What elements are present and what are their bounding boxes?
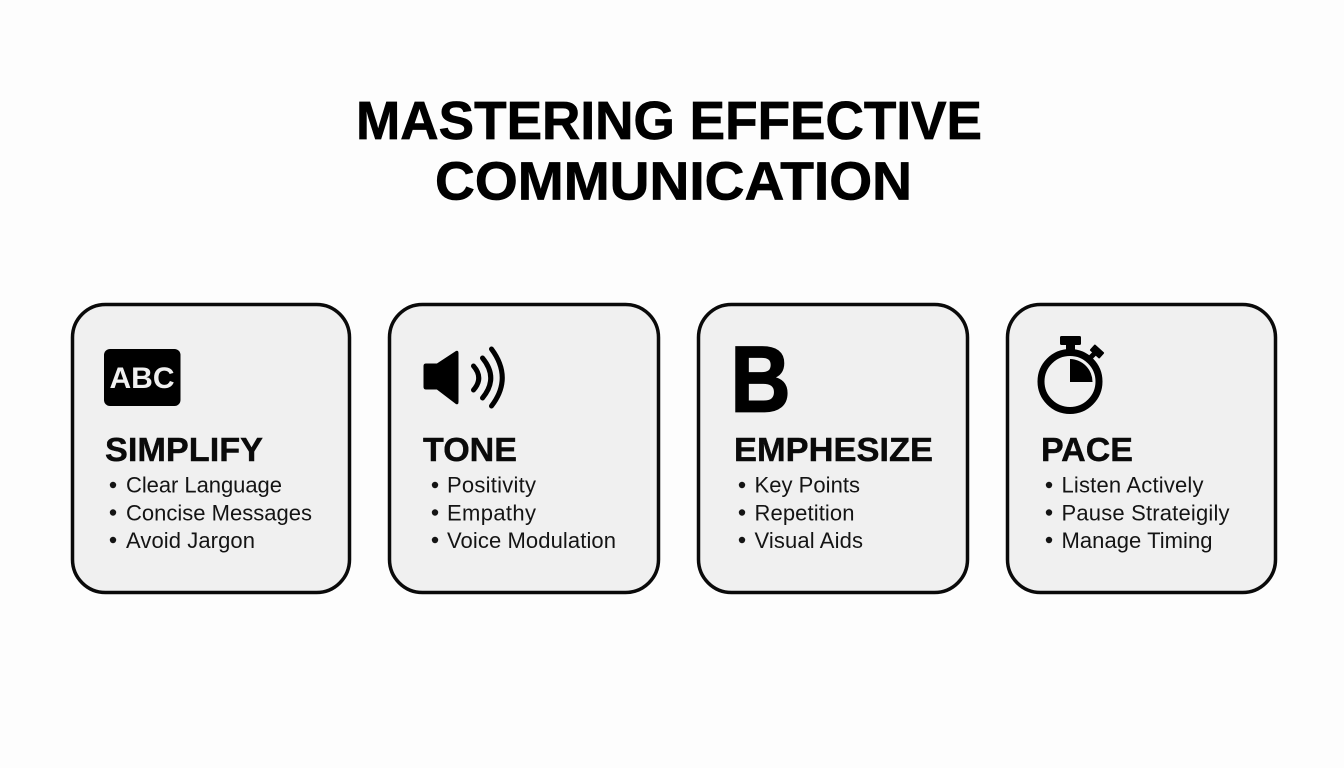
title [356, 91, 982, 212]
panel: simplify [72, 304, 350, 592]
title: MASTERING EFFECTIVE [356, 91, 982, 151]
list: pace items [1046, 472, 1230, 553]
list: pace items: Manage Timing [1062, 528, 1212, 553]
list: simplify items [110, 472, 312, 553]
icon: bold B: B [730, 327, 791, 432]
icon: ABC: ABC [110, 362, 174, 395]
list: simplify items: Avoid Jargon [126, 528, 255, 553]
list: emphesize items: Key Points [754, 472, 860, 498]
list: pace items: Listen Actively [1062, 472, 1204, 498]
icon: stopwatch [1041, 336, 1105, 410]
list: tone items [432, 472, 616, 553]
heading: pace: PACE [1041, 431, 1133, 468]
panel: emphesize [698, 304, 968, 592]
list: tone items: Empathy [447, 500, 536, 526]
panel: tone [390, 304, 658, 592]
heading: emphesize: EMPHESIZE [734, 431, 933, 468]
icon: speaker [424, 349, 502, 406]
list: simplify items: Clear Language [126, 472, 282, 498]
list: emphesize items: Repetition [754, 500, 854, 526]
heading: simplify: SIMPLIFY [105, 431, 263, 468]
list: emphesize items: Visual Aids [754, 528, 863, 553]
heading: tone: TONE [423, 431, 517, 468]
list: simplify items: Concise Messages [126, 500, 312, 526]
list: tone items: Voice Modulation [447, 528, 616, 553]
title: COMMUNICATION [435, 152, 912, 212]
list: tone items: Positivity [447, 472, 536, 498]
list: emphesize items [739, 472, 863, 553]
panel: pace [1008, 304, 1276, 592]
icon: ABC [104, 349, 180, 406]
list: pace items: Pause Strateigily [1062, 500, 1230, 526]
